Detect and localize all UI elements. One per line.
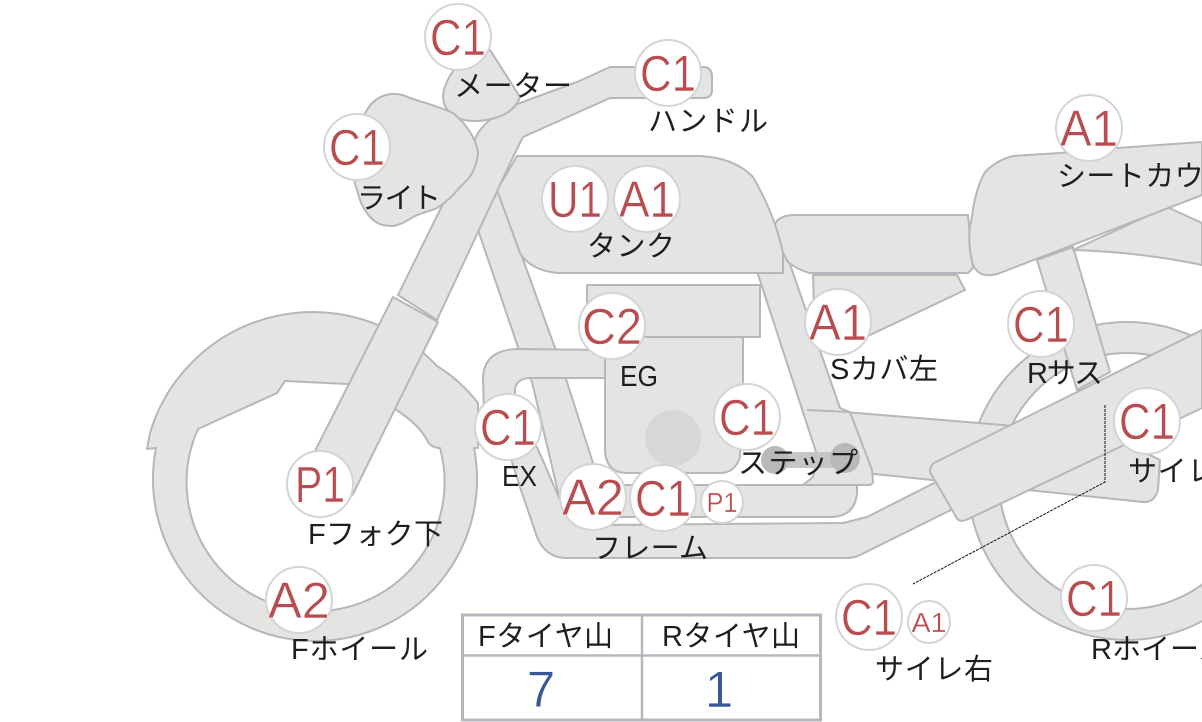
meter (443, 50, 520, 121)
engine crank cover (645, 410, 701, 466)
badge: rear wheel C1: C1 (1066, 570, 1122, 627)
badge: side cover A1: A1 (809, 294, 867, 351)
table header: rear tire: Rタイヤ山 (662, 621, 800, 653)
step plate line (807, 410, 850, 412)
badge: meter C1: C1 (430, 9, 486, 66)
exhaust lower pipe (590, 485, 857, 517)
label: engine: EG (620, 361, 658, 393)
tire tread table (462, 615, 821, 720)
badge: engine C2: C2 (582, 298, 642, 355)
badge: handle C1: C1 (640, 45, 696, 102)
badge: frame C1: C1 (635, 470, 691, 527)
rear shock (1037, 247, 1110, 390)
seat rail (1073, 207, 1202, 265)
badge: seat cowl A1: A1 (1060, 100, 1118, 157)
badge: step C1: C1 (719, 389, 775, 446)
label: front wheel: Fホイール (291, 634, 428, 666)
rear wheel (968, 322, 1202, 640)
table value: front tire: 7 (527, 661, 555, 718)
foot step (761, 443, 860, 474)
label: side cover left: Sカバ左 (830, 353, 938, 386)
badge: tank A1: A1 (619, 171, 675, 228)
badge: light C1: C1 (329, 119, 385, 176)
lower frame tube (505, 440, 955, 558)
fuel tank (497, 156, 783, 273)
seat cowl (969, 142, 1202, 275)
muffler (930, 330, 1202, 521)
badge: exhaust C1: C1 (480, 399, 536, 456)
badge: tank U1: U1 (548, 171, 602, 228)
front fork lower tube (315, 297, 438, 504)
label: handle: ハンドル (648, 106, 768, 138)
table value: rear tire: 1 (705, 661, 733, 718)
badge: silencer right A1 small: A1 (912, 607, 946, 638)
frame down tube (478, 190, 600, 500)
leader line (913, 405, 1105, 584)
badge: frame P1 small (701, 481, 743, 523)
badge: front wheel A2: A2 (268, 572, 330, 629)
badge: rear suspension C1: C1 (1013, 296, 1069, 353)
label: light: ライト (357, 183, 441, 215)
badge: silencer right A1 small (908, 601, 950, 643)
badge: frame A2: A2 (562, 469, 624, 526)
label: rear suspension: Rサス (1027, 358, 1103, 390)
rear frame tube (754, 250, 873, 485)
label: frame: フレーム (592, 533, 708, 565)
swing arm (845, 412, 1160, 502)
label: step: ステップ (738, 448, 858, 480)
engine body (605, 335, 743, 473)
badge: silencer right C1: C1 (841, 589, 897, 646)
exhaust upper pipe (483, 349, 610, 415)
label: front fork lower: Fフォク下 (308, 519, 443, 551)
label: meter: メーター (454, 71, 572, 103)
badge: frame P1 small: P1 (706, 487, 738, 518)
label: silencer right: サイレ右 (875, 653, 993, 686)
side tank (773, 215, 973, 273)
engine head (587, 285, 760, 337)
badge: silencer left C1: C1 (1119, 393, 1175, 450)
side cover (813, 275, 965, 345)
label: exhaust: EX (502, 461, 537, 493)
headlight (345, 94, 478, 226)
front wheel and fender (147, 312, 478, 641)
badge: front fork P1: P1 (295, 456, 345, 513)
handlebar and upper fork (398, 67, 712, 320)
table header: front tire: Fタイヤ山 (478, 621, 613, 653)
label: tank: タンク (587, 231, 675, 263)
